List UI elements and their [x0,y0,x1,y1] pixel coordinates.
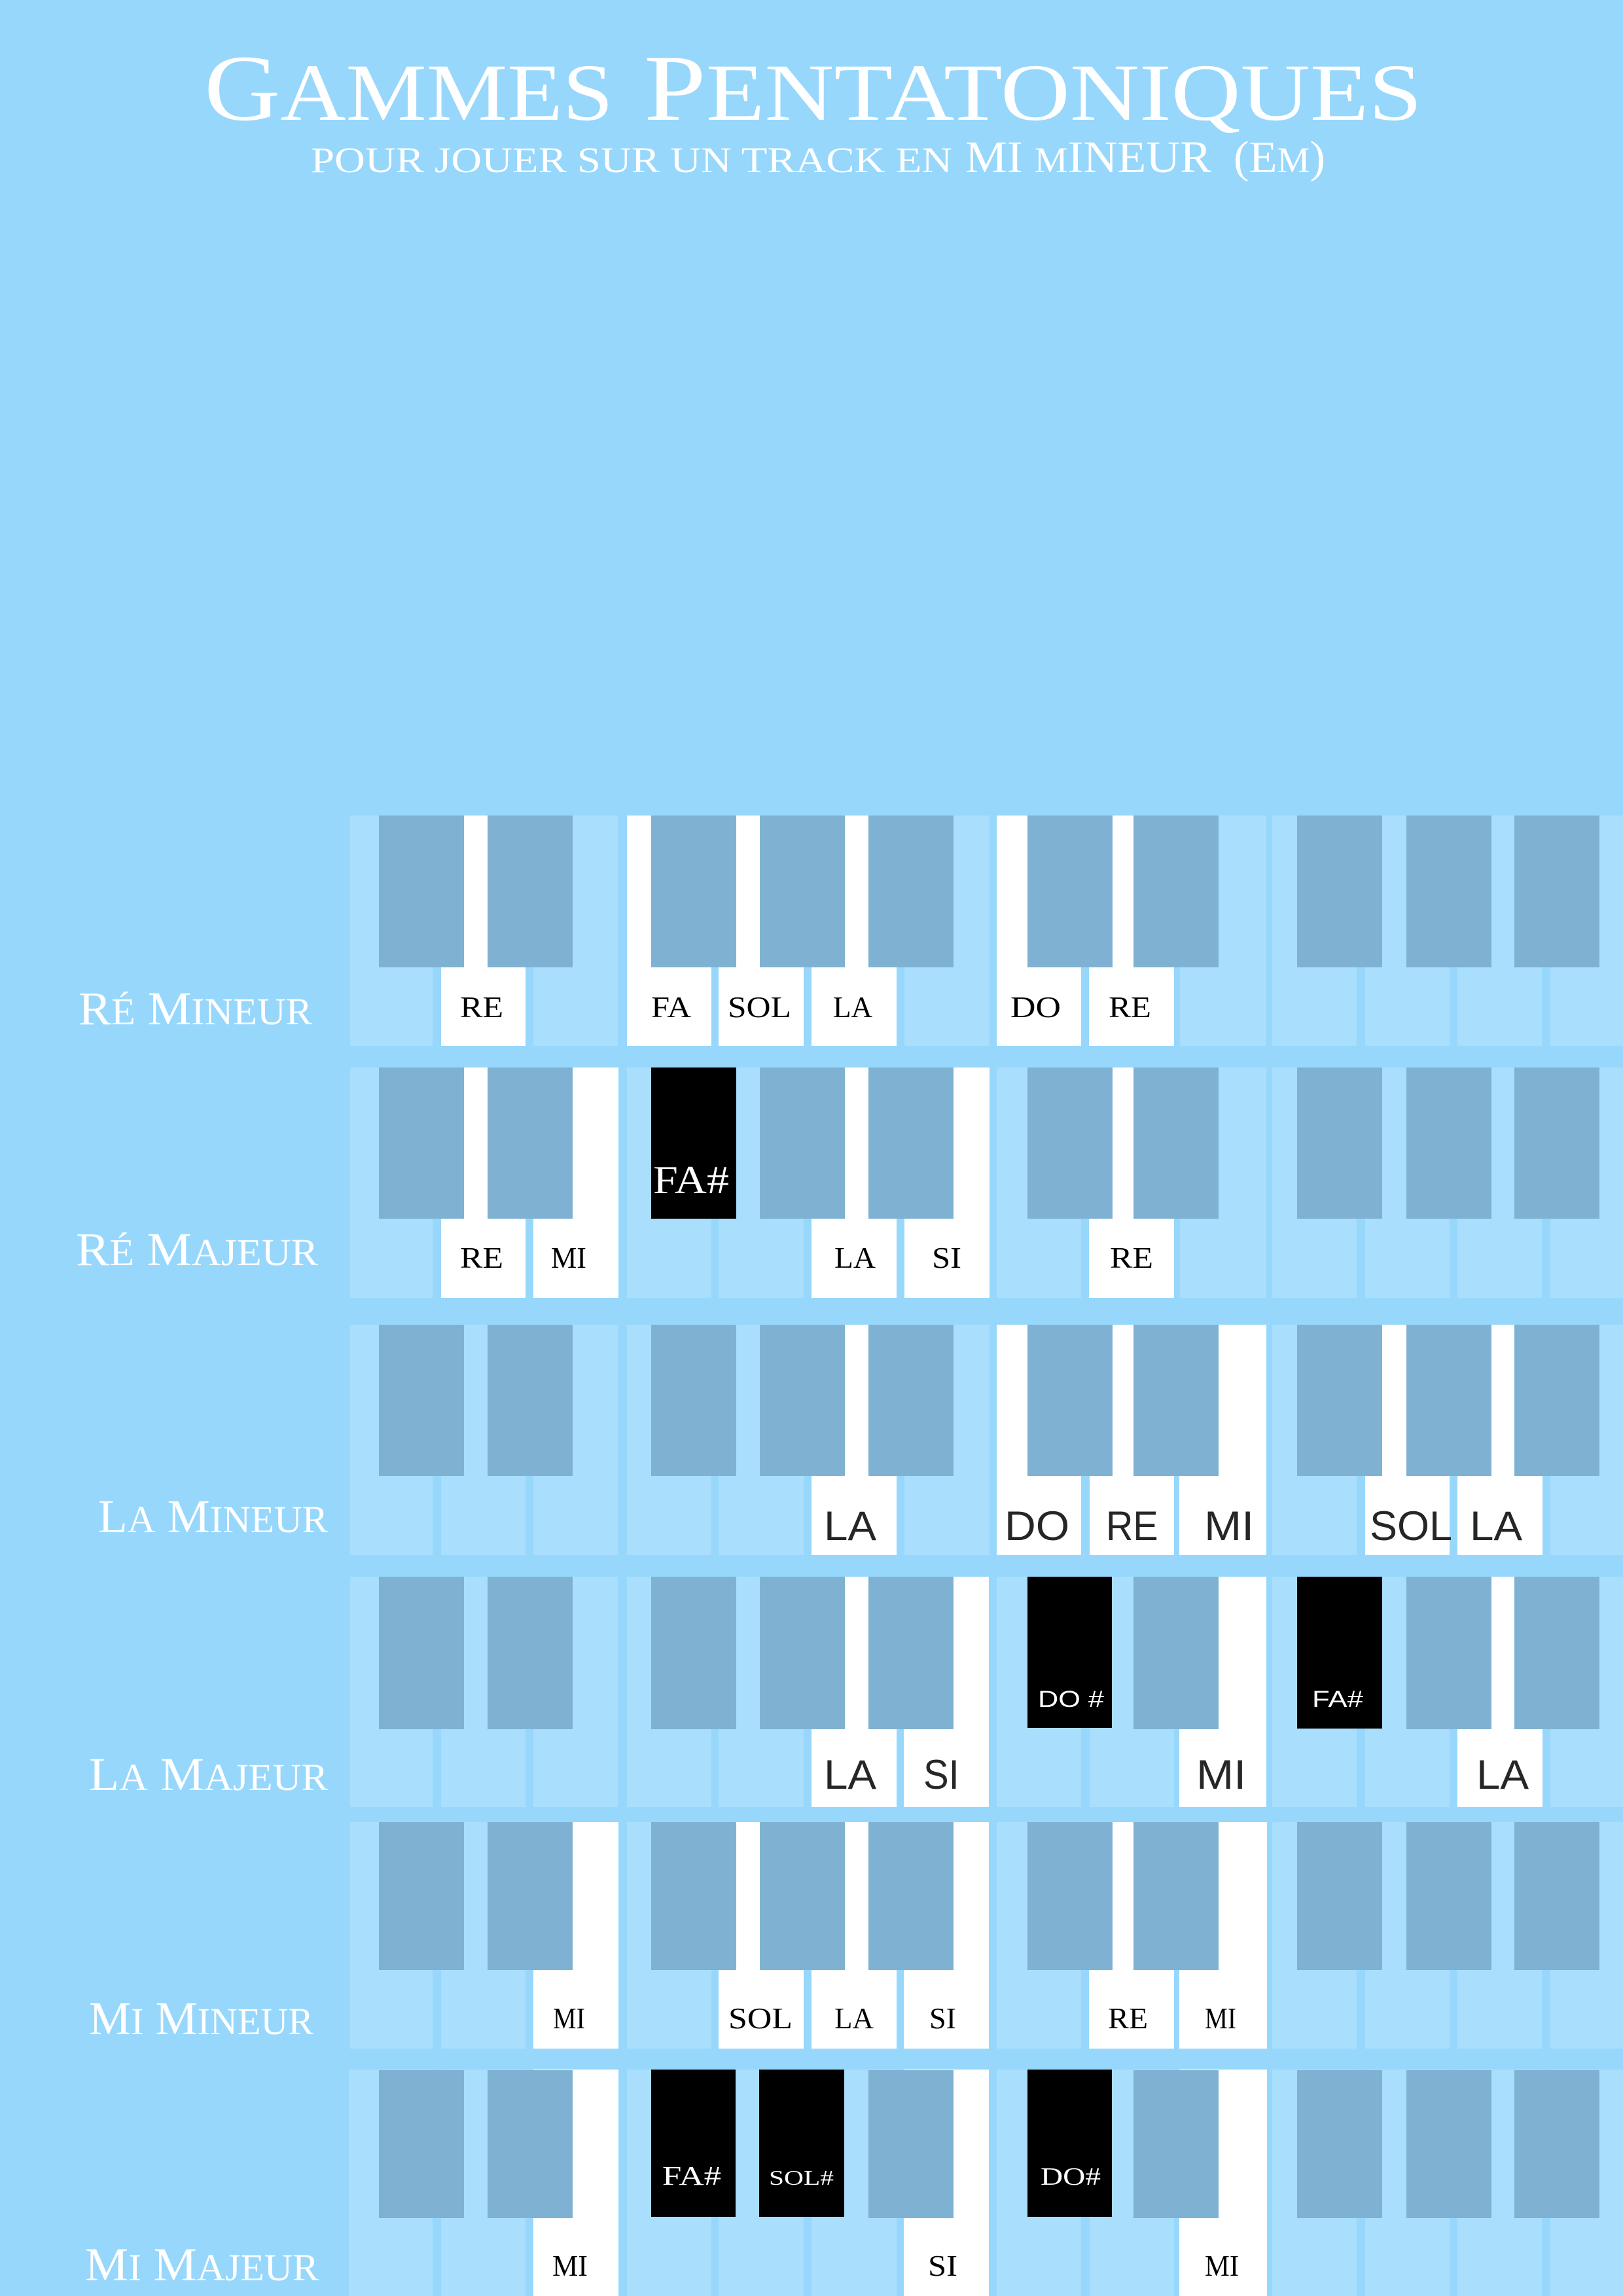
unplayed black keys [379,1325,1599,1476]
key SOL#: SOL# [769,2166,834,2189]
key FA: FA [651,990,691,1024]
subtitle: POUR JOUER SUR UN TRACK EN [311,140,952,180]
unplayed white keys [350,1325,1623,1555]
key RE: RE [1106,1502,1158,1549]
key LA [812,1577,897,1807]
key LA: LA [834,2001,874,2035]
key FA# [1297,1577,1382,1729]
key RE [441,816,526,1046]
key SI: SI [928,2249,957,2282]
key MI [533,1822,618,2049]
unplayed white keys [350,1577,1623,1807]
key MI [533,1067,618,1298]
key RE: RE [1110,1241,1153,1274]
key RE: RE [460,990,503,1024]
key SI [904,1822,989,2049]
row label: RÉ MINEUR [79,982,312,1035]
key FA# [651,2070,736,2217]
subtitle [311,132,1325,182]
key LA: LA [824,1503,876,1549]
row: La Mineur [98,1325,1623,1555]
key RE: RE [1108,2001,1148,2035]
row: Ré Majeur [76,1067,1623,1298]
row: Ré Mineur [79,816,1623,1046]
key SOL [719,1822,804,2049]
key MI: MI [1205,2001,1236,2035]
key LA: LA [834,1241,876,1274]
subtitle: MI MINEUR [965,132,1211,182]
key SI: SI [929,2001,956,2035]
key SOL [719,816,804,1046]
key SI [904,1577,989,1807]
key MI: MI [1196,1751,1246,1797]
key RE [1090,1325,1174,1555]
row label: MI MINEUR [89,1992,313,2045]
key DO: DO [1005,1503,1069,1549]
subtitle: (EM) [1234,132,1325,182]
key MI: MI [551,1241,586,1274]
key RE [441,1067,526,1298]
key SI: SI [923,1751,959,1798]
key DO#: DO# [1041,2163,1101,2191]
key RE [1089,1822,1174,2049]
key DO [997,1325,1081,1555]
unplayed black keys [379,1577,1599,1729]
key MI: MI [1205,2249,1239,2282]
unplayed black keys [379,2070,1599,2218]
key MI [533,2070,618,2296]
unplayed white keys [350,1822,1623,2049]
key LA [812,1822,897,2049]
key SOL# [759,2070,844,2217]
key SI: SI [932,1241,961,1274]
row: Mi Majeur [85,2070,1623,2296]
key DO: DO [1010,990,1061,1024]
key LA: LA [1476,1751,1529,1798]
key SOL [1365,1325,1452,1555]
key FA# [651,1067,736,1219]
key FA#: FA# [653,1158,729,1202]
key DO [997,816,1081,1046]
key RE: RE [460,1241,503,1274]
key DO#: DO # [1038,1687,1105,1712]
key MI: MI [553,2001,585,2035]
key LA [812,1325,897,1555]
key MI [1179,1325,1266,1555]
key MI [1179,2070,1267,2296]
row label: LA MINEUR [98,1490,328,1543]
key MI: MI [1204,1503,1254,1549]
unplayed white keys [350,1067,1623,1298]
key RE [1089,1067,1174,1298]
key MI [1179,1822,1267,2049]
key FA#: FA# [662,2161,721,2191]
key LA [1457,1577,1543,1807]
unplayed white keys [350,816,1623,1046]
row label: MI MAJEUR [85,2238,319,2291]
row label: LA MAJEUR [89,1748,328,1801]
key LA: LA [1470,1503,1522,1549]
unplayed white keys [349,2070,1623,2296]
key DO# [1027,2070,1112,2217]
key RE: RE [1109,990,1151,1024]
unplayed black keys [379,816,1599,967]
key SOL: SOL [1370,1503,1452,1549]
row: Mi Mineur [89,1822,1623,2049]
row label: RÉ MAJEUR [76,1223,318,1276]
key LA [1457,1325,1543,1555]
title: PENTATONIQUES [644,37,1422,141]
key RE [1089,816,1174,1046]
row: La Majeur [89,1577,1623,1807]
title: GAMMES [204,37,613,141]
key DO# [1027,1577,1112,1728]
key LA [812,816,897,1046]
key LA: LA [824,1751,876,1798]
title [204,37,1422,141]
key LA [812,1067,897,1298]
key SI [904,2070,989,2296]
key MI: MI [552,2249,588,2282]
key SOL: SOL [728,2001,793,2035]
key MI [1179,1577,1266,1807]
key SI [904,1067,990,1298]
unplayed black keys [379,1822,1599,1970]
key SOL: SOL [728,990,791,1024]
key FA#: FA# [1312,1687,1364,1712]
key FA [627,816,711,1046]
key LA: LA [833,990,872,1024]
unplayed black keys [379,1067,1599,1219]
